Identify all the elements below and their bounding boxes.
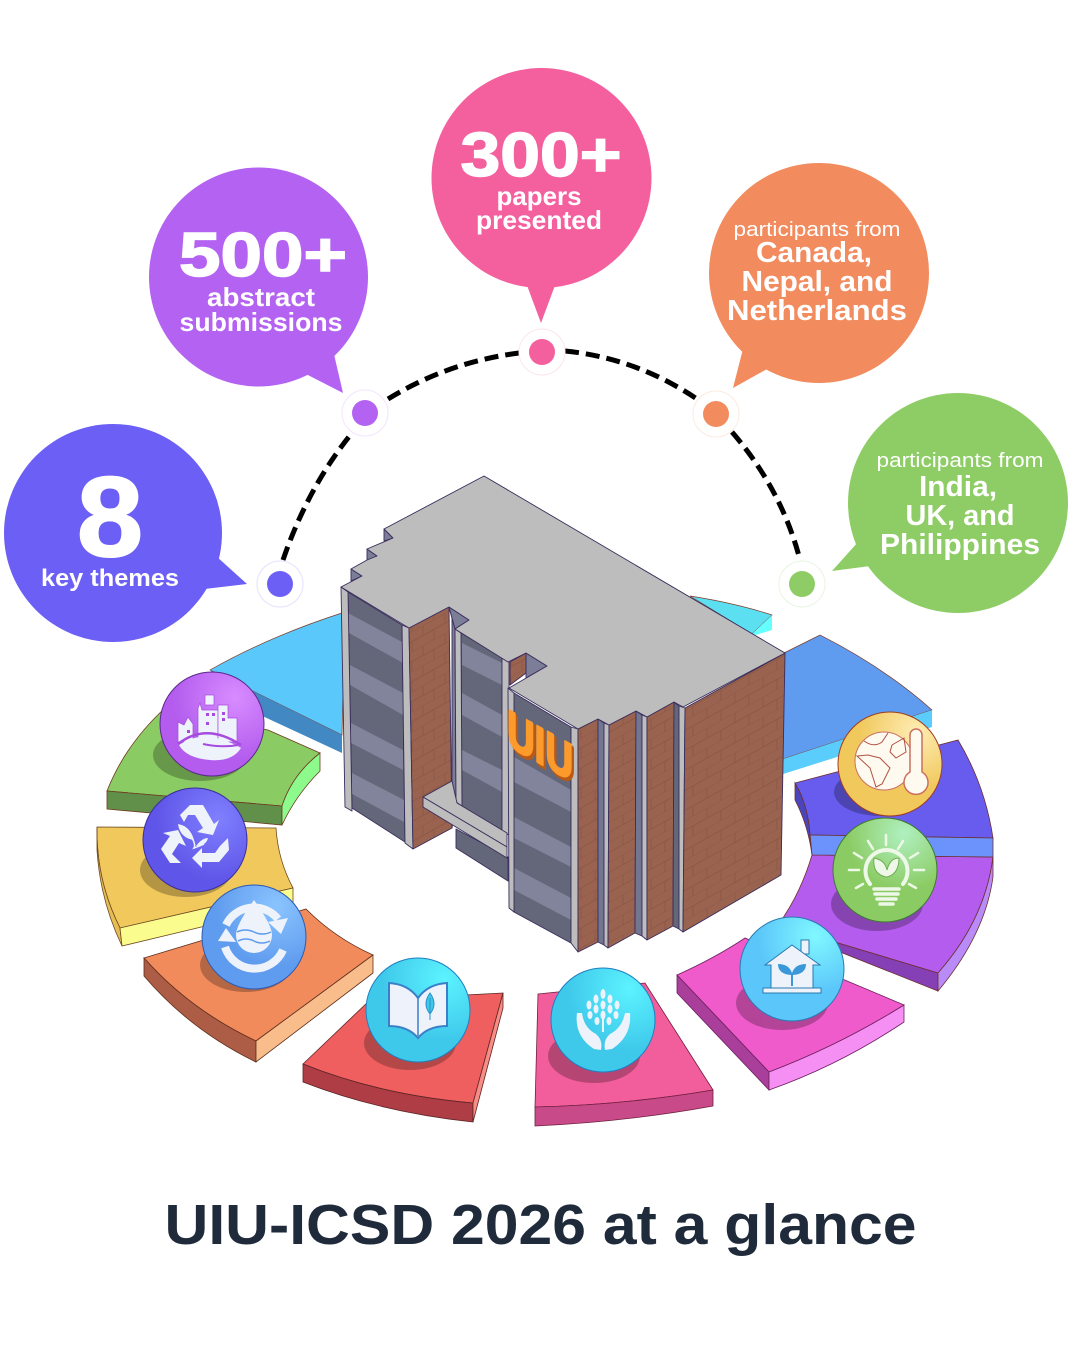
dashed timeline arc bbox=[283, 351, 800, 560]
bubble: participants from Canada, Nepal, Netherlands: participants from bbox=[734, 219, 900, 241]
timeline node: orange bbox=[693, 391, 739, 437]
bubble: participants from India, UK, Philippines: participants from bbox=[876, 450, 1044, 472]
bubble: 8 key themes: 8 bbox=[77, 454, 143, 580]
ring segment: pink bbox=[535, 983, 713, 1126]
bubble: 500+ abstract submissions bbox=[149, 168, 368, 393]
icon: hands holding wheat bbox=[551, 968, 655, 1072]
bubble: 500+ abstract submissions: 500+ bbox=[179, 221, 347, 290]
icon: green house bbox=[740, 917, 844, 1021]
building sign: UIU bbox=[507, 698, 575, 796]
icon: sustainable city on leaf bbox=[160, 672, 264, 776]
ring segment: cyan back bbox=[690, 596, 772, 636]
bubble: participants from India, UK, Philippines: India, bbox=[919, 471, 997, 503]
bubble: 500+ abstract submissions: abstract bbox=[207, 282, 315, 312]
building: entrance ledge bbox=[423, 781, 507, 858]
building: left brick wall bbox=[409, 607, 452, 849]
bubble: participants from Canada, Nepal, Netherlands: Netherlands bbox=[727, 295, 907, 327]
bubble: 300+ papers presented: 300+ bbox=[460, 121, 622, 190]
ring segment: blue bbox=[780, 635, 932, 775]
ring segment: orange bbox=[144, 909, 373, 1062]
bubble: 8 key themes bbox=[4, 424, 247, 642]
bubble: participants from India, UK, Philippines bbox=[832, 393, 1068, 613]
bubble: 500+ abstract submissions: submissions bbox=[180, 307, 342, 337]
building sign: UIU: UIU bbox=[507, 698, 573, 793]
timeline node: green bbox=[779, 561, 825, 607]
bubble: 300+ papers presented bbox=[432, 68, 652, 323]
bubble: 300+ papers presented: papers bbox=[496, 181, 582, 211]
bubble: participants from Canada, Nepal, Netherlands bbox=[709, 163, 929, 388]
icon: water cycle bbox=[202, 885, 306, 989]
bubble: 300+ papers presented: presented bbox=[476, 205, 602, 235]
building: recess behind left wing bbox=[449, 607, 456, 828]
building: roof bbox=[341, 476, 785, 729]
building: roof notches bbox=[351, 529, 547, 678]
bubble: participants from India, UK, Philippines: UK, and bbox=[906, 500, 1014, 532]
ring segment: yellow bbox=[97, 827, 293, 946]
timeline node: pink bbox=[519, 329, 565, 375]
ring segment: red bbox=[303, 993, 503, 1122]
ring segment: sky blue bbox=[210, 612, 345, 753]
bubble: 8 key themes: key themes bbox=[41, 565, 179, 592]
building: right facade bbox=[578, 653, 785, 952]
icon: book with leaf bbox=[366, 958, 470, 1062]
bubble: participants from Canada, Nepal, Netherlands: Nepal, and bbox=[742, 266, 892, 298]
building: left window column bbox=[341, 587, 413, 849]
icon: energy bulb with leaves bbox=[833, 818, 937, 922]
ring segment: purple bbox=[778, 855, 993, 991]
building: central recessed window bbox=[455, 629, 509, 835]
icon: globe with thermometer bbox=[838, 712, 942, 816]
timeline node: purple bbox=[342, 390, 388, 436]
building: lower entrance block bbox=[456, 829, 508, 881]
ring segment: green bbox=[107, 708, 320, 825]
ring segment: magenta bbox=[677, 938, 904, 1090]
bubble: participants from Canada, Nepal, Netherlands: Canada, bbox=[756, 237, 872, 269]
icon: recycling with sprout bbox=[143, 788, 247, 892]
bubble: participants from India, UK, Philippines: Philippines bbox=[880, 529, 1040, 561]
building: front window column bbox=[508, 688, 578, 952]
title: UIU-ICSD 2026 at a glance bbox=[164, 1193, 916, 1257]
ring segment: indigo bbox=[795, 740, 993, 857]
building: small brick notch bbox=[510, 653, 526, 685]
timeline node: indigo bbox=[257, 561, 303, 607]
building: UIU campus bbox=[341, 476, 785, 952]
building sign: UIU: UIU bbox=[509, 701, 575, 796]
icon shadows bbox=[140, 729, 926, 1083]
